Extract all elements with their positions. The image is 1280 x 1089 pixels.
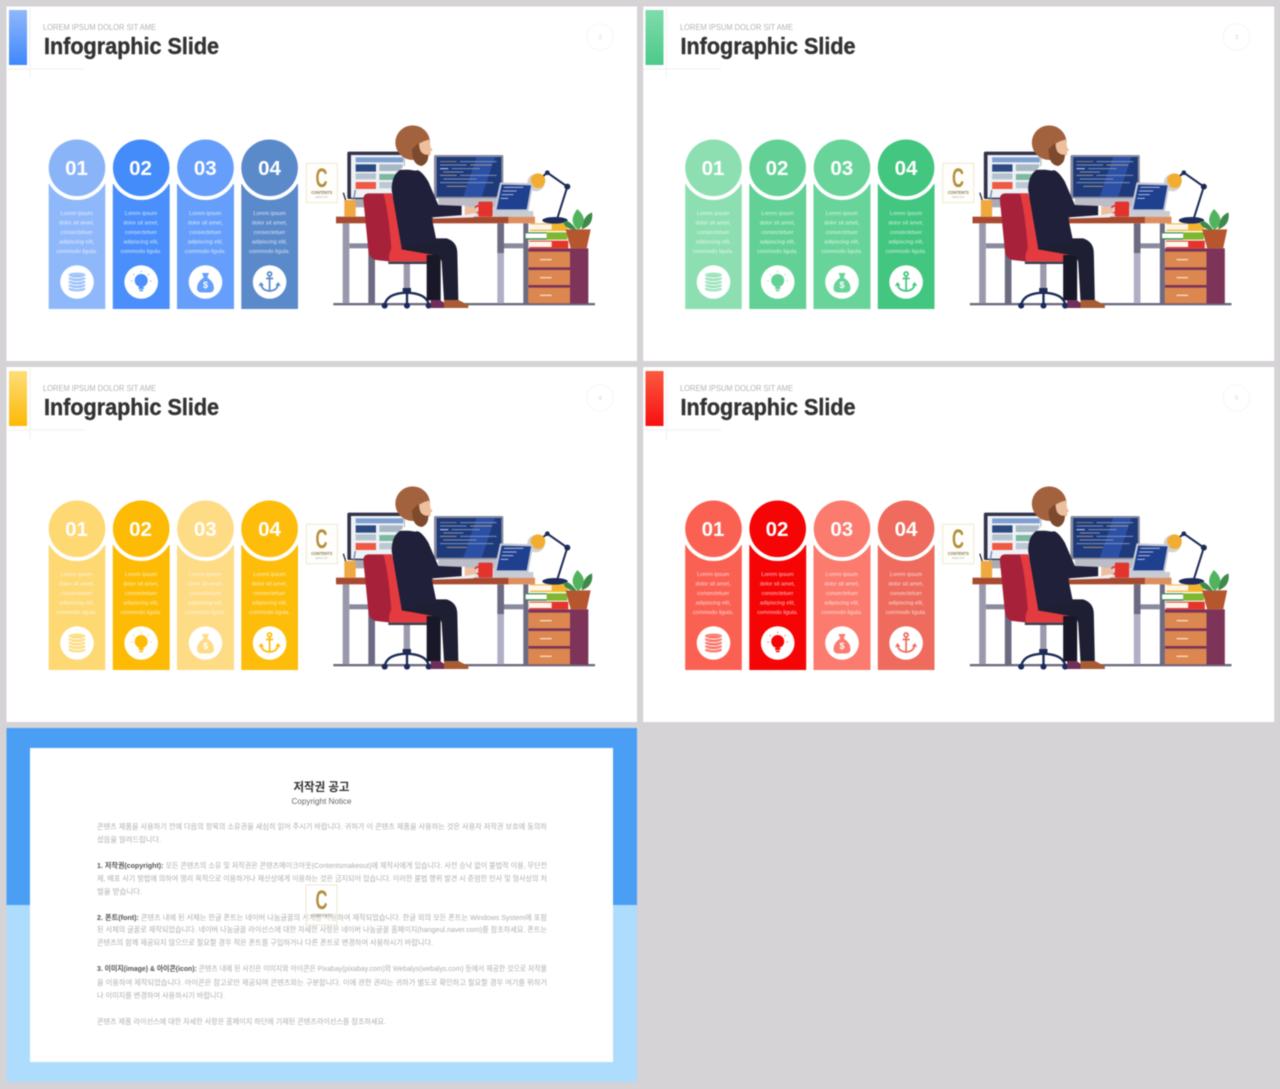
- column 04: [874, 136, 938, 309]
- column 03: $: [839, 641, 845, 651]
- title: Infographic Slide: [680, 394, 856, 420]
- column 04: consectetuer: [890, 230, 922, 236]
- column 02: commodo ligula.: [121, 610, 162, 616]
- column 04: 04: [895, 157, 918, 180]
- column 02: Lorem ipsum: [761, 211, 794, 217]
- page number: [587, 385, 613, 411]
- column 04: [874, 497, 938, 670]
- column 02: 02: [766, 518, 788, 541]
- slide: green: [643, 6, 1274, 361]
- watermark logo: [306, 163, 337, 203]
- panel: copyright notice: [6, 728, 637, 1082]
- column 01: commodo ligula.: [693, 610, 734, 616]
- column 01: [682, 136, 746, 309]
- column 02: dolor sit amet,: [123, 582, 159, 588]
- title: Infographic Slide: [680, 33, 856, 59]
- accent bar: [9, 10, 27, 65]
- column 03: [174, 497, 238, 670]
- column 04: [238, 497, 302, 670]
- watermark logo: C: [316, 885, 328, 915]
- column 03: consectetuer: [826, 230, 858, 236]
- watermark logo: C: [316, 524, 328, 554]
- notice intro: 콘텐츠 제품을 사용하기 전에 다음의 항목의 소유권을 세심히 읽어 주시기 바랍니다. 귀하가 이 콘텐츠 제품을 사용하는 것은 사용자 저작권 보호에 동의하: [97, 822, 547, 831]
- watermark logo: CONTENTS: [948, 551, 969, 556]
- column 01: adipiscing elit,: [59, 600, 95, 606]
- column 04: dolor sit amet,: [888, 220, 924, 226]
- page number: [587, 24, 613, 50]
- column 03: $: [839, 280, 845, 290]
- column 03: consectetuer: [826, 591, 858, 597]
- notice subheading: Copyright Notice: [292, 796, 352, 806]
- column 01: adipiscing elit,: [696, 600, 731, 606]
- clause 2: font: [97, 913, 547, 947]
- column 02: commodo ligula.: [121, 249, 162, 255]
- page number: 2: [598, 35, 602, 41]
- column 04: consectetuer: [253, 230, 286, 236]
- column 03: consectetuer: [189, 591, 221, 597]
- column 04: dolor sit amet,: [888, 582, 924, 588]
- watermark logo: C: [952, 163, 964, 193]
- column 03: dolor sit amet,: [188, 220, 223, 226]
- column 03: Lorem ipsum: [189, 211, 222, 217]
- watermark logo: CONTENTS: [311, 913, 332, 918]
- column 04: [238, 136, 302, 309]
- column 02: adipiscing elit,: [123, 600, 159, 606]
- column 02: Lorem ipsum: [761, 572, 794, 578]
- column 04: commodo ligula.: [249, 610, 290, 616]
- column 03: adipiscing elit,: [188, 600, 223, 606]
- column 03: consectetuer: [189, 230, 221, 236]
- column 01: 01: [65, 518, 88, 541]
- column 01: dolor sit amet,: [59, 220, 95, 226]
- column 01: dolor sit amet,: [696, 220, 731, 226]
- column 01: commodo ligula.: [56, 610, 98, 616]
- column 02: [746, 136, 810, 309]
- column 02: Lorem ipsum: [125, 572, 157, 578]
- watermark logo: [943, 163, 974, 203]
- column 03: [810, 497, 874, 670]
- column 03: commodo ligula.: [185, 610, 226, 616]
- column 04: dolor sit amet,: [252, 582, 288, 588]
- column 02: dolor sit amet,: [760, 220, 796, 226]
- column 01: Lorem ipsum: [61, 211, 93, 217]
- illustration: developer at desk: [970, 486, 1231, 670]
- column 04: adipiscing elit,: [888, 600, 924, 606]
- clause 1: copyright: [97, 861, 547, 896]
- column 01: 01: [702, 157, 724, 180]
- column 04: commodo ligula.: [249, 249, 290, 255]
- watermark logo: [943, 524, 974, 564]
- watermark logo: MAKE OUT: [952, 557, 965, 560]
- column 01: commodo ligula.: [693, 249, 734, 255]
- accent bar: [9, 371, 27, 426]
- clause 2: font: 된 서체의 글꼴로 제작되었습니다. 네이버 나눔글꼴 라이선스에 대한 자세한 사항은 네이버 나눔글꼴 홈페이지(hangeul.naver.com)를 참조하세요. 폰트는: [97, 925, 547, 934]
- column 02: 02: [129, 157, 152, 180]
- column 03: Lorem ipsum: [826, 572, 858, 578]
- column 02: consectetuer: [761, 230, 794, 236]
- clause 1: copyright: 1. 저작권(copyright): 모든 콘텐츠의 소유 및 저작권은 콘텐츠메이크아웃(Contentsmakeout)에 제작사에게 있습니다. 사전 승낙 없이 불법적 이용, 무단전: [97, 861, 547, 870]
- column 01: Lorem ipsum: [697, 572, 730, 578]
- illustration: developer at desk: [333, 486, 595, 670]
- column 02: [109, 136, 173, 309]
- watermark logo: MAKE OUT: [316, 196, 329, 199]
- illustration: developer at desk: [333, 125, 595, 309]
- watermark logo: CONTENTS: [311, 190, 332, 195]
- column 02: dolor sit amet,: [760, 582, 796, 588]
- column 01: [45, 497, 109, 670]
- clause 2: font: 콘텐츠의 함께 제공되지 않으므로 필요할 경우 적은 폰트를 구입하거나 다른 폰트로 변경하여 사용하시기 바랍니다.: [97, 938, 433, 947]
- column 01: consectetuer: [61, 591, 93, 597]
- column 03: [810, 136, 874, 309]
- column 03: dolor sit amet,: [824, 582, 860, 588]
- column 02: commodo ligula.: [757, 610, 798, 616]
- title: Infographic Slide: [44, 394, 219, 420]
- slide: red: [643, 367, 1274, 722]
- column 02: dolor sit amet,: [123, 220, 159, 226]
- column 01: [682, 497, 746, 670]
- column 04: commodo ligula.: [886, 610, 927, 616]
- column 03: dolor sit amet,: [188, 582, 223, 588]
- watermark logo: [306, 524, 337, 564]
- title: Infographic Slide: [44, 33, 219, 59]
- column 04: adipiscing elit,: [888, 239, 924, 245]
- column 04: 04: [895, 518, 918, 541]
- column 01: consectetuer: [697, 591, 729, 597]
- column 03: 03: [194, 518, 217, 541]
- column 03: commodo ligula.: [821, 610, 863, 616]
- clause 3: image and icon: 을 이용하여 제작되었습니다. 아이콘은 참고로만 제공되며 콘텐츠와는 구분합니다. 이에 관한 권리는 귀하가 별도로 확인하고 필요할 경우 여기를 위하거: [97, 978, 547, 987]
- notice intro: [97, 822, 547, 844]
- column 03: commodo ligula.: [821, 249, 863, 255]
- column 01: 01: [65, 157, 88, 180]
- column 04: consectetuer: [890, 591, 922, 597]
- column 04: 04: [258, 157, 281, 180]
- column 02: 02: [766, 157, 788, 180]
- column 03: dolor sit amet,: [824, 220, 860, 226]
- column 02: consectetuer: [125, 230, 157, 236]
- column 04: Lorem ipsum: [253, 572, 286, 578]
- watermark logo: CONTENTS: [311, 551, 332, 556]
- column 03: 03: [830, 157, 853, 180]
- column 03: [174, 136, 238, 309]
- column 04: dolor sit amet,: [252, 220, 288, 226]
- column 01: consectetuer: [697, 230, 729, 236]
- column 01: [45, 136, 109, 309]
- column 02: Lorem ipsum: [125, 211, 157, 217]
- column 01: commodo ligula.: [56, 249, 98, 255]
- column 02: commodo ligula.: [757, 249, 798, 255]
- notice heading: 저작권 공고: [294, 779, 350, 794]
- header subtitle: LOREM IPSUM DOLOR SIT AME: [43, 383, 156, 393]
- column 01: dolor sit amet,: [696, 582, 731, 588]
- column 01: adipiscing elit,: [696, 239, 731, 245]
- column 01: consectetuer: [61, 230, 93, 236]
- column 01: Lorem ipsum: [697, 211, 730, 217]
- column 02: 02: [129, 518, 152, 541]
- column 02: [746, 497, 810, 670]
- license note: 콘텐츠 제품 라이선스에 대한 자세한 사항은 홈페이지 하단에 기재된 콘텐츠라이선스를 참조하세요.: [97, 1017, 386, 1026]
- watermark logo: [306, 885, 337, 925]
- page number: 3: [1235, 35, 1239, 41]
- column 01: 01: [702, 518, 724, 541]
- column 04: 04: [258, 518, 281, 541]
- column 04: Lorem ipsum: [253, 211, 286, 217]
- column 04: Lorem ipsum: [890, 211, 922, 217]
- column 03: Lorem ipsum: [826, 211, 858, 217]
- column 02: adipiscing elit,: [760, 239, 796, 245]
- page number: 4: [598, 396, 602, 402]
- accent bar: [646, 371, 664, 426]
- slide: blue: [6, 6, 637, 361]
- column 01: Lorem ipsum: [61, 572, 93, 578]
- column 03: commodo ligula.: [185, 249, 226, 255]
- column 02: consectetuer: [125, 591, 157, 597]
- column 04: Lorem ipsum: [890, 572, 922, 578]
- slide: yellow: [6, 367, 637, 722]
- illustration: developer at desk: [970, 125, 1231, 309]
- column 02: consectetuer: [761, 591, 794, 597]
- watermark logo: C: [316, 163, 328, 193]
- notice intro: 셨음을 알려드립니다.: [97, 835, 161, 844]
- header subtitle: LOREM IPSUM DOLOR SIT AME: [680, 383, 793, 393]
- clause 3: image and icon: 3. 이미지(image) & 아이콘(icon): 콘텐츠 내에 된 사진은 이미지와 아이콘은 Pixabay(pixabay.com)와 Webalys(webalys.com) 등에서 제공한 것으로 저작물: [97, 964, 547, 973]
- watermark logo: C: [952, 524, 964, 554]
- column 01: adipiscing elit,: [59, 239, 95, 245]
- clause 3: image and icon: 나 이미지를 변경하여 사용하시기 바랍니다.: [97, 991, 225, 1000]
- column 03: 03: [830, 518, 853, 541]
- page number: [1223, 24, 1250, 50]
- column 02: [109, 497, 173, 670]
- column 04: adipiscing elit,: [252, 600, 288, 606]
- page number: 5: [1235, 396, 1239, 402]
- clause 1: copyright: 벌을 받습니다.: [97, 887, 142, 896]
- page number: [1223, 385, 1250, 411]
- column 04: commodo ligula.: [886, 249, 927, 255]
- header subtitle: LOREM IPSUM DOLOR SIT AME: [680, 22, 793, 32]
- column 03: $: [203, 280, 208, 290]
- column 04: consectetuer: [253, 591, 286, 597]
- watermark logo: MAKE OUT: [316, 557, 329, 560]
- column 01: dolor sit amet,: [59, 582, 95, 588]
- column 03: adipiscing elit,: [824, 239, 860, 245]
- clause 1: copyright: 재, 배포 사기 방법에 의하여 영리 목적으로 이용하거나 재산상에게 이용하는 것은 금지되어 있습니다. 이러한 불법 행위 발견 시 준엄한 민사 및 형사상의 처: [97, 874, 547, 883]
- accent bar: [646, 10, 664, 65]
- clause 3: image and icon: [97, 964, 547, 1000]
- column 03: adipiscing elit,: [824, 600, 860, 606]
- column 03: adipiscing elit,: [188, 239, 223, 245]
- column 02: adipiscing elit,: [760, 600, 796, 606]
- column 03: Lorem ipsum: [189, 572, 222, 578]
- column 03: 03: [194, 157, 217, 180]
- watermark logo: MAKE OUT: [952, 196, 965, 199]
- watermark logo: CONTENTS: [948, 190, 969, 195]
- clause 2: font: 2. 폰트(font): 콘텐츠 내에 된 서체는 한글 폰트는 네이버 나눔글꼴의 서체를 사용하여 제작되었습니다. 한글 외의 모든 폰트는 Windows System에 포함: [97, 913, 547, 922]
- column 02: adipiscing elit,: [123, 239, 159, 245]
- header subtitle: LOREM IPSUM DOLOR SIT AME: [43, 22, 156, 32]
- column 04: adipiscing elit,: [252, 239, 288, 245]
- column 03: $: [203, 641, 208, 651]
